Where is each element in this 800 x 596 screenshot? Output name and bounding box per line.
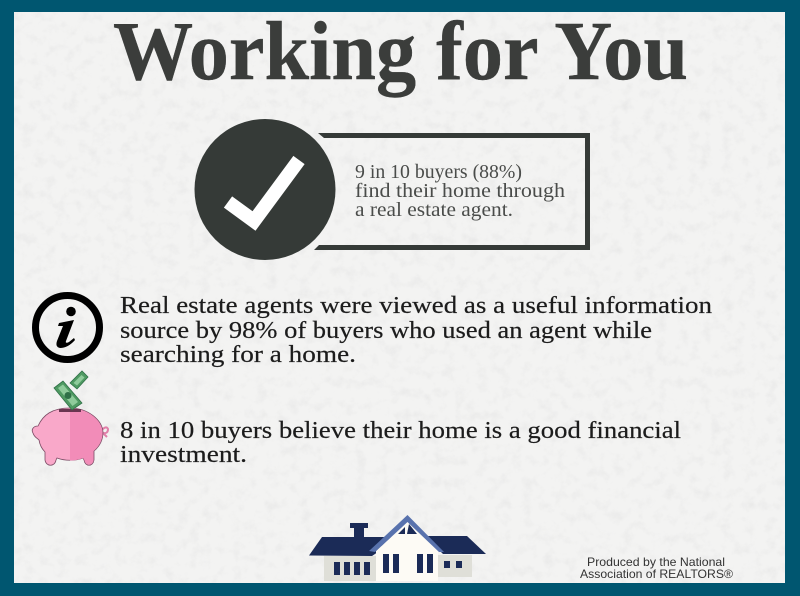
gable window (398, 524, 417, 534)
right wing (438, 555, 472, 577)
icon: piggy bank with money (32, 371, 108, 465)
callout text (355, 162, 565, 221)
pig tail (101, 427, 108, 437)
investment text block (120, 418, 681, 468)
main gable (376, 522, 438, 581)
pig body (32, 408, 103, 465)
callout: 9 in 10 buyers (194, 119, 590, 260)
banknote large (54, 381, 82, 410)
title: Working for You (113, 5, 688, 98)
callout text: 9 in 10 buyers (88%) (355, 162, 522, 183)
banknote small (70, 371, 88, 389)
agents text block: Real estate agents were viewed as a useful information (120, 293, 712, 319)
roofs (309, 537, 400, 556)
front windows (383, 554, 433, 573)
left wing (324, 556, 376, 581)
agents text block: searching for a home. (120, 342, 356, 368)
credit text (580, 555, 733, 581)
right wing windows (444, 561, 462, 568)
icon: check mark (194, 119, 336, 260)
chimney (350, 523, 368, 540)
agents text block: source by 98% of buyers who used an agent while (120, 318, 652, 344)
investment text block: 8 in 10 buyers believe their home is a good financial (120, 418, 681, 444)
icon: information (36, 296, 100, 360)
credit text: Produced by the National (587, 555, 725, 569)
left wing windows (334, 562, 370, 575)
agents text block (120, 293, 712, 368)
callout frame (314, 133, 590, 250)
callout text: find their home through (355, 181, 565, 202)
investment text block: investment. (120, 442, 247, 468)
callout text: a real estate agent. (355, 200, 513, 221)
credit text: Association of REALTORS® (580, 567, 733, 581)
icon: house (309, 515, 486, 581)
